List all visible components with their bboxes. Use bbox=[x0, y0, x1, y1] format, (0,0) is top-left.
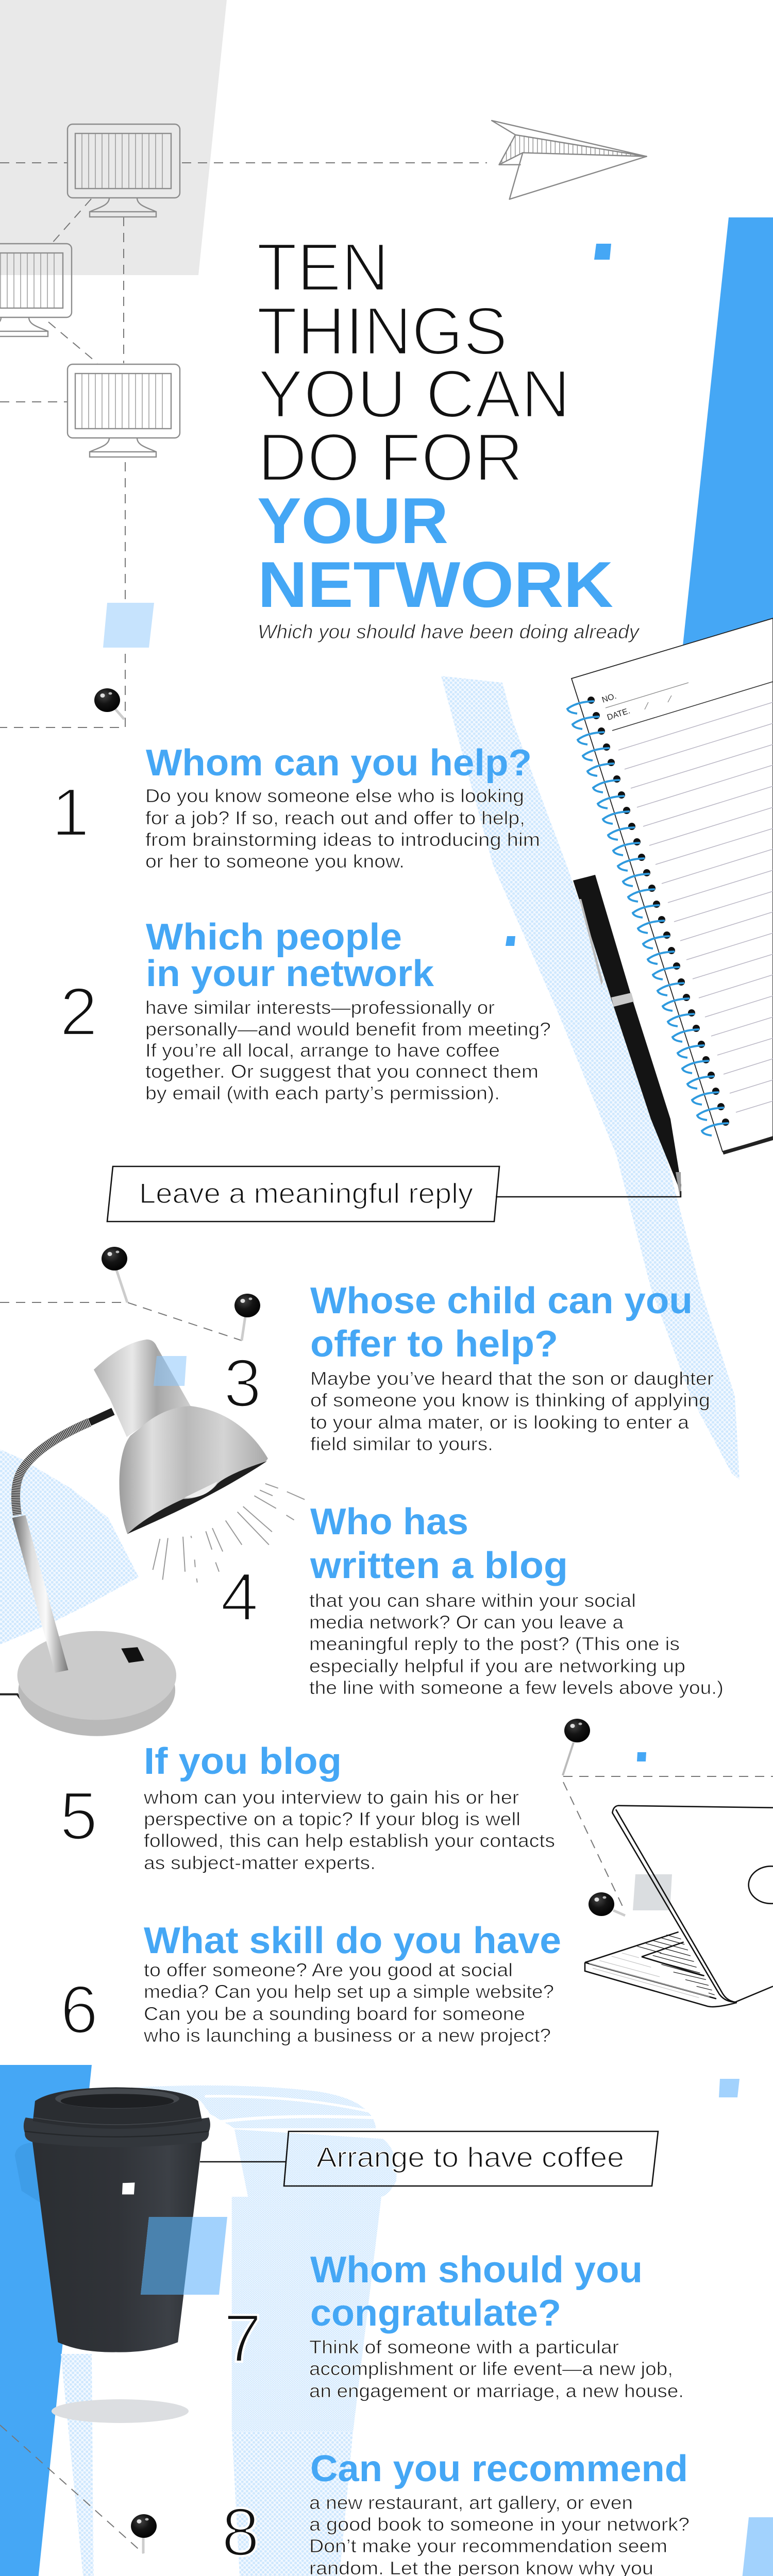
network diagram bbox=[0, 124, 487, 727]
cup body bbox=[32, 2141, 202, 2352]
number 5: 5 bbox=[60, 1778, 97, 1854]
body text: a new restaurant, art gallery, or even bbox=[309, 2492, 633, 2513]
light blue square bbox=[103, 603, 154, 648]
item 1 bbox=[52, 742, 540, 872]
title: YOUR bbox=[257, 484, 448, 557]
heading bbox=[146, 917, 434, 994]
notebook bbox=[567, 618, 773, 1155]
small light blue square bbox=[719, 2079, 740, 2097]
heading bbox=[310, 2249, 643, 2334]
spiral binding bbox=[567, 697, 729, 1136]
item 7 bbox=[224, 2249, 684, 2401]
body text: meaningful reply to the post? (This one is bbox=[309, 1633, 680, 1654]
coffee cup bbox=[24, 2087, 210, 2352]
body text bbox=[309, 1590, 724, 1698]
body text: Maybe you’ve heard that the son or daughter bbox=[310, 1368, 714, 1389]
lid logo bbox=[749, 1866, 773, 1904]
heading: Which people bbox=[146, 917, 402, 958]
body text: to offer someone? Are you good at social bbox=[144, 1959, 513, 1980]
dashed connectors: laptop bbox=[563, 1776, 773, 1906]
monitor three bbox=[68, 364, 180, 457]
keyboard hatching bbox=[637, 1935, 715, 1995]
item 4 bbox=[221, 1501, 724, 1698]
left blue panel bbox=[0, 2065, 92, 2576]
body text bbox=[310, 1368, 714, 1454]
small blue square bbox=[594, 244, 611, 260]
grey backdrop panel bbox=[0, 0, 227, 275]
cup ground shadow bbox=[52, 2399, 189, 2423]
title: THINGS bbox=[257, 293, 508, 369]
body text: followed, this can help establish your contacts bbox=[144, 1830, 555, 1851]
body text: If you’re all local, arrange to have coffee bbox=[145, 1040, 500, 1061]
body text: by email (with each party’s permission). bbox=[145, 1082, 500, 1104]
title bbox=[257, 229, 613, 621]
heading: Whom can you help? bbox=[146, 742, 532, 784]
item 8 bbox=[222, 2448, 690, 2576]
title: YOU CAN bbox=[258, 356, 570, 432]
number 8: 8 bbox=[222, 2494, 259, 2570]
item 3 bbox=[224, 1280, 714, 1454]
body text: as subject-matter experts. bbox=[144, 1852, 376, 1873]
number 2: 2 bbox=[60, 974, 97, 1049]
body text: together. Or suggest that you connect them bbox=[145, 1061, 539, 1082]
form labels: NO. bbox=[601, 692, 617, 705]
body text: of someone you know is thinking of applying bbox=[310, 1389, 710, 1411]
body text: field similar to yours. bbox=[310, 1433, 493, 1454]
callout: leave a meaningful reply bbox=[107, 1166, 681, 1222]
halftone cup shadow bbox=[15, 2086, 397, 2576]
body text: from brainstorming ideas to introducing him bbox=[145, 829, 540, 850]
blue accent panel top right bbox=[683, 217, 773, 646]
body text: Think of someone with a particular bbox=[309, 2336, 619, 2358]
cup label bbox=[122, 2182, 135, 2194]
heading bbox=[310, 1280, 693, 1365]
grey square on laptop bbox=[633, 1874, 672, 1910]
body text: media? Can you help set up a simple website? bbox=[144, 1981, 554, 2002]
cup lid bbox=[33, 2087, 202, 2129]
translucent blue rectangle on cup bbox=[141, 2217, 227, 2295]
lamp neck bbox=[94, 1340, 191, 1437]
pin pair with dashed link bbox=[0, 1247, 260, 1341]
dashed connectors bbox=[0, 163, 487, 727]
body text: Do you know someone else who is looking bbox=[145, 785, 524, 806]
heading: in your network bbox=[146, 953, 434, 994]
lamp dome bbox=[119, 1406, 268, 1534]
pin left bbox=[102, 1247, 127, 1302]
dashed connector to pin bbox=[0, 2425, 143, 2553]
subtitle: Which you should have been doing already bbox=[258, 621, 640, 643]
callout: leave a meaningful reply: Leave a meaningful reply bbox=[139, 1177, 474, 1209]
item 2 bbox=[60, 917, 551, 1104]
pen bbox=[573, 875, 681, 1196]
body text bbox=[143, 1787, 555, 1873]
title: DO FOR bbox=[258, 419, 524, 495]
body text: whom can you interview to gain his or her bbox=[143, 1787, 519, 1808]
body text bbox=[145, 997, 551, 1104]
small blue square bbox=[637, 1752, 646, 1761]
pin: title bbox=[94, 688, 124, 719]
body text: personally—and would benefit from meeting? bbox=[145, 1019, 551, 1040]
pin: laptop upper bbox=[563, 1719, 590, 1775]
heading: Can you recommend bbox=[310, 2448, 688, 2489]
cup rim bbox=[24, 2117, 210, 2147]
body text: that you can share within your social bbox=[309, 1590, 636, 1611]
dashed connector bbox=[0, 1302, 242, 1341]
number 7: 7 bbox=[224, 2300, 261, 2376]
title: TEN bbox=[257, 229, 389, 305]
body text: to your alma mater, or is looking to enter a bbox=[310, 1412, 690, 1433]
monitor one bbox=[68, 124, 180, 217]
lamp base bbox=[18, 1631, 176, 1736]
body text bbox=[145, 785, 540, 872]
body text: an engagement or marriage, a new house. bbox=[309, 2380, 684, 2401]
heading: Whose child can you bbox=[310, 1280, 693, 1321]
body text bbox=[143, 1959, 554, 2046]
light blue panel bottom right bbox=[637, 2517, 773, 2576]
form labels bbox=[601, 682, 773, 731]
callout: arrange to have coffee bbox=[200, 2131, 658, 2186]
body text: perspective on a topic? If your blog is well bbox=[144, 1808, 520, 1829]
desk lamp bbox=[0, 1340, 305, 1736]
heading: Whom should you bbox=[310, 2249, 643, 2291]
number 1: 1 bbox=[52, 774, 89, 850]
heading: offer to help? bbox=[310, 1324, 558, 1365]
laptop base bbox=[585, 1932, 737, 2007]
number 3: 3 bbox=[224, 1345, 261, 1421]
halftone lamp shadow bbox=[0, 1449, 139, 1645]
body text bbox=[309, 2492, 690, 2576]
item 5 bbox=[60, 1741, 555, 1873]
body text: for a job? If so, reach out and offer to help, bbox=[145, 807, 525, 828]
body text bbox=[309, 2336, 684, 2401]
pin: laptop lower bbox=[589, 1892, 625, 1916]
body text: accomplishment or life event—a new job, bbox=[309, 2358, 673, 2379]
number 4: 4 bbox=[221, 1559, 258, 1635]
translucent blue square on lamp bbox=[154, 1356, 187, 1386]
trackpad bbox=[642, 1942, 704, 1976]
pin right bbox=[234, 1294, 260, 1341]
heading: congratulate? bbox=[310, 2293, 561, 2334]
body text: the line with someone a few levels above you.) bbox=[309, 1677, 724, 1698]
heading: written a blog bbox=[310, 1545, 568, 1586]
body text: or her to someone you know. bbox=[145, 851, 405, 872]
icon: paper plane bbox=[492, 121, 647, 199]
lamp pole bbox=[12, 1515, 68, 1673]
item 6 bbox=[60, 1920, 561, 2047]
halftone pen shadow band bbox=[441, 676, 740, 1480]
form labels: DATE. bbox=[606, 706, 631, 722]
heading: Who has bbox=[310, 1501, 468, 1543]
callout: arrange to have coffee: Arrange to have coffee bbox=[316, 2141, 624, 2173]
monitor two bbox=[0, 244, 72, 336]
heading: What skill do you have bbox=[144, 1920, 561, 1961]
pin: item 8 bbox=[131, 2514, 157, 2553]
small blue square bbox=[506, 936, 515, 946]
laptop bbox=[585, 1806, 773, 2007]
heading: If you blog bbox=[144, 1741, 342, 1782]
title: NETWORK bbox=[258, 548, 613, 621]
ruled lines bbox=[618, 702, 773, 1112]
heading bbox=[310, 1501, 568, 1586]
number 6: 6 bbox=[60, 1972, 98, 2047]
body text: Don’t make your recommendation seem bbox=[309, 2535, 667, 2556]
body text: have similar interests—professionally or bbox=[145, 997, 495, 1018]
body text: a good book to someone in your network? bbox=[309, 2514, 690, 2535]
body text: media network? Or can you leave a bbox=[309, 1612, 624, 1633]
light rays bbox=[153, 1484, 305, 1583]
body text: especially helpful if you are networking up bbox=[309, 1655, 685, 1676]
body text: who is launching a business or a new project? bbox=[143, 2025, 551, 2046]
cord bbox=[0, 1694, 23, 1702]
laptop lid bbox=[612, 1806, 773, 2002]
gooseneck bbox=[15, 1412, 113, 1515]
body text: Can you be a sounding board for someone bbox=[144, 2003, 525, 2024]
